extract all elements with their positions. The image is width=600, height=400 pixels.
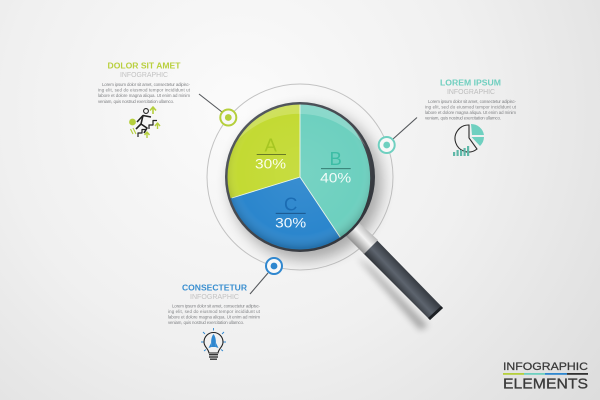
text block: consectetur: ing elit, sed do eiusmod tempor incididunt ut <box>168 309 261 314</box>
text block: consectetur: CONSECTETUR <box>182 283 248 293</box>
text block: lorem ipsum: LOREM IPSUM <box>440 78 501 88</box>
pie label A: 30% <box>255 156 286 172</box>
pie label C: 30% <box>275 215 306 231</box>
magnifier shadow <box>230 108 428 330</box>
text block: lorem ipsum: INFOGRAPHIC <box>447 87 495 96</box>
magnifier handle <box>346 222 443 320</box>
text block: dolor sit amet <box>98 60 191 104</box>
slice dividers <box>232 100 342 240</box>
icon: person climbing stairs <box>129 107 160 138</box>
text block: lorem ipsum: Lorem ipsum dolor sit amet, consectetur adipisc- <box>428 99 517 104</box>
text block: lorem ipsum <box>425 78 517 121</box>
connector: green <box>199 94 222 112</box>
slice B <box>300 97 370 240</box>
marker: teal <box>379 137 395 153</box>
text block: dolor sit amet: INFOGRAPHIC <box>120 70 168 79</box>
text block: lorem ipsum: veniam, quis nostrud exercitation ullamco. <box>425 116 501 121</box>
logo: infographic elements <box>503 361 588 392</box>
text block: dolor sit amet: veniam, quis nostrud exercitation ullamco. <box>98 99 174 104</box>
marker: green <box>220 110 236 126</box>
slice A <box>228 104 300 198</box>
icon: pie chart with bars <box>453 124 484 156</box>
text block: lorem ipsum: ing elit, sed do eiusmod tempor incididunt ut <box>425 105 517 110</box>
pie label B: B <box>330 148 342 169</box>
logo: infographic elements: INFOGRAPHIC <box>503 361 588 373</box>
pie label B: 40% <box>320 170 351 186</box>
text block: consectetur: veniam, quis nostrud exercitation ullamco. <box>168 320 244 325</box>
marker: blue <box>266 258 282 274</box>
text block: dolor sit amet: ing elit, sed do eiusmod tempor incididunt ut <box>98 88 191 92</box>
connector: teal <box>393 118 417 139</box>
pie label A <box>255 134 286 172</box>
text block: consectetur: labore et dolore magna aliqua. Ut enim ad minim <box>168 314 260 320</box>
text block: dolor sit amet: Lorem ipsum dolor sit amet, consectetur adipisc- <box>102 82 191 87</box>
text block: dolor sit amet: DOLOR SIT AMET <box>108 60 181 70</box>
text block: consectetur: Lorem ipsum dolor sit amet, consectetur adipisc- <box>172 304 261 308</box>
pie label B <box>320 148 351 186</box>
logo: infographic elements: ELEMENTS <box>503 376 588 392</box>
slice C <box>230 178 340 250</box>
orbit ring <box>207 84 393 270</box>
pie label C: C <box>284 194 297 215</box>
text block: consectetur: INFOGRAPHIC <box>190 292 239 301</box>
pie label C <box>275 194 306 231</box>
vignette <box>228 140 370 250</box>
text block: consectetur <box>168 283 261 325</box>
gloss <box>238 104 366 147</box>
text block: lorem ipsum: labore et dolore magna aliqua. Ut enim ad minim <box>425 110 516 115</box>
pie label A: A <box>265 134 278 156</box>
connector: blue <box>250 273 268 294</box>
text block: dolor sit amet: labore et dolore magna aliqua. Ut enim ad minim <box>98 93 190 98</box>
icon: rocket light bulb <box>201 328 226 360</box>
magnifier lens pie chart <box>222 97 375 252</box>
